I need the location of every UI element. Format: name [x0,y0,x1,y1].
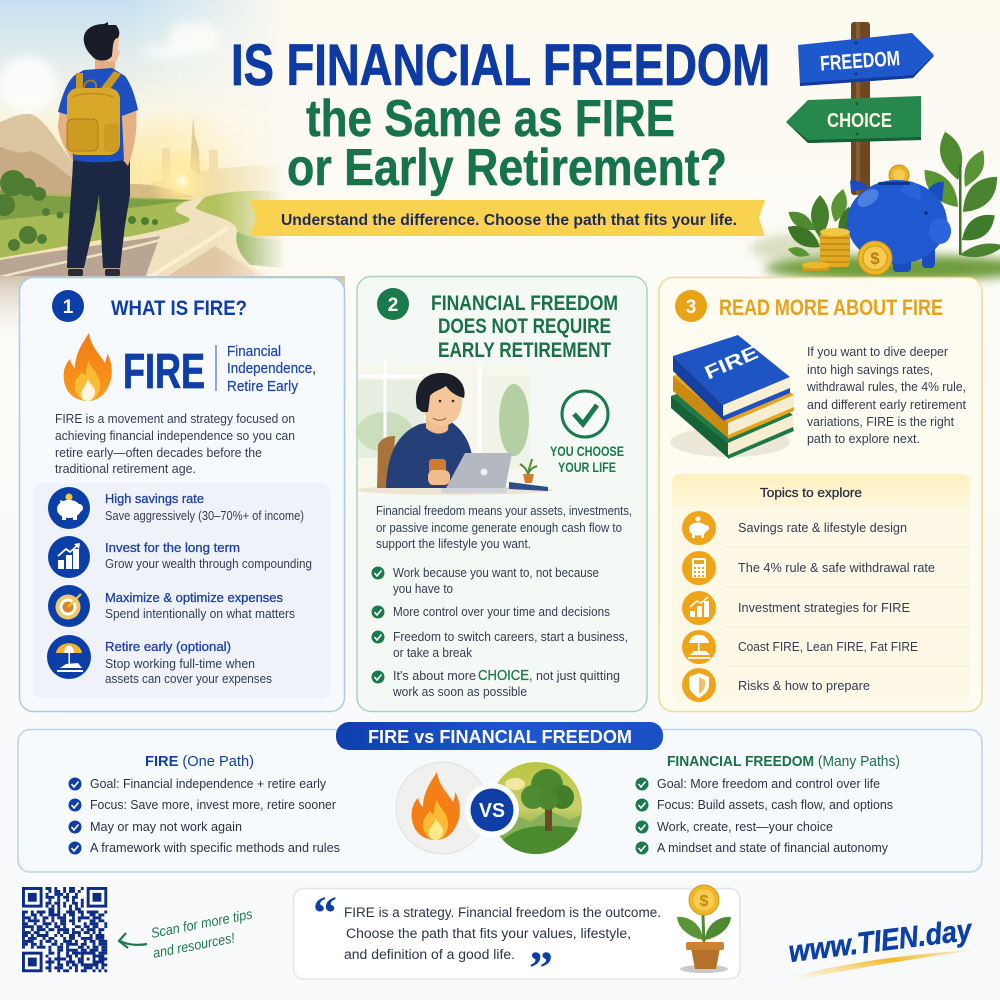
item: high savings rate: Save aggressively (30–70%+ of income) [105,508,304,523]
topic: investment strategies [682,591,910,625]
illustration: stack of books: FIRE [702,342,761,384]
icon: piggy bank with coins [802,165,951,275]
freedom list: A mindset and state of financial autonomy [657,840,888,855]
bullet list: , not just quitting [529,668,620,683]
freedom list: Work, create, rest—your choice [657,819,833,834]
item: retire early optional: assets can cover your expenses [105,671,272,686]
subtitle ribbon [250,200,765,236]
item: maximize and optimize expenses: Spend intentionally on what matters [105,606,295,621]
sign: freedom [798,33,934,86]
quote text [344,905,661,962]
sign: choice [786,96,921,143]
topic: coast lean fat fire: Coast FIRE, Lean FIRE, Fat FIRE [738,639,918,654]
description: and different early retirement [807,397,966,412]
opening quote mark: “ [313,887,337,940]
item: maximize and optimize expenses: Maximize & optimize expenses [105,590,283,605]
freedom list: Focus: Build assets, cash flow, and options [657,797,893,812]
closing quote mark: ” [529,942,553,995]
website logo: www.TIEN.day [787,914,975,969]
description [806,344,966,446]
description: retire early—often decades before the [55,445,262,460]
number badge 1: 1 [63,297,74,318]
bullet list: Work because you want to, not because [393,565,599,580]
title: IS FINANCIAL FREEDOM [231,33,770,98]
bullet list [392,565,628,699]
title: or Early Retirement? [287,139,727,197]
vs graphic [396,762,582,854]
fire definition: Retire Early [227,379,299,395]
item: invest for the long term: Invest for the long term [105,540,240,555]
scan caption: Scan for more tips [150,906,254,941]
fire list: May or may not work again [90,819,242,834]
signpost and plants [750,22,1000,281]
panel: what is fire [20,278,344,712]
vs graphic: VS [479,800,505,822]
topics heading: Topics to explore [760,485,862,500]
item: invest for the long term [105,540,312,571]
fire list: Focus: Save more, invest more, retire sooner [90,797,337,812]
quote box [294,885,740,995]
icon: beach umbrella [47,635,91,679]
column heading: financial freedom: FINANCIAL FREEDOM (Many Paths) [667,753,900,770]
bullet list: Freedom to switch careers, start a business, [393,629,628,644]
heading: FINANCIAL FREEDOM [431,292,618,315]
sign: choice: CHOICE [827,110,892,132]
hero illustration: sky and clouds [0,0,290,278]
number badge 2: 2 [388,295,398,316]
item: maximize and optimize expenses [105,590,295,621]
description: traditional retirement age. [55,461,196,476]
qr code [21,886,108,973]
hero illustration: person with backpack [58,22,138,276]
topic: coast lean fat fire [682,630,918,664]
topic: 4 percent rule: The 4% rule & safe withdrawal rate [738,560,935,575]
description: Financial freedom means your assets, investments, [376,503,632,518]
topic: risks [682,668,870,702]
bullet list: CHOICE [478,667,529,684]
hero illustration: landscape with path [0,114,285,278]
description: If you want to dive deeper [807,344,949,359]
number badge 3 [675,290,707,322]
heading pill [336,722,663,750]
fire checks [68,778,82,854]
topic: investment strategies: Investment strategies for FIRE [738,600,910,615]
fire definition: Independence, [227,361,316,377]
icon: flame [64,333,112,401]
item: retire early optional: Stop working full-time when [105,656,255,671]
bullet list: or take a break [393,645,472,660]
illustration: stack of books [670,335,794,459]
number badge 1 [52,290,84,322]
number badge 2 [377,288,409,320]
icon: coin plant: $ [700,893,709,910]
item: high savings rate: High savings rate [105,491,204,506]
description: support the lifestyle you want. [376,536,531,551]
sign: freedom: FREEDOM [819,47,901,76]
panel: read more about fire [659,278,982,712]
bullet list: It's about more [393,668,476,683]
heading [431,292,618,362]
panel: fire vs financial freedom comparison [18,722,982,872]
heading: EARLY RETIREMENT [438,339,611,362]
description: into high savings rates, [807,362,933,377]
fire wordmark: FIRE [123,345,205,399]
item: retire early optional [105,639,272,686]
item: high savings rate [105,491,304,523]
icon: growth chart [48,536,90,578]
heading pill: FIRE vs FINANCIAL FREEDOM [368,727,632,747]
item: invest for the long term: Grow your wealth through compounding [105,556,312,571]
fire list [90,776,340,855]
freedom list: Goal: More freedom and control over life [657,776,880,791]
icon: target [48,585,90,627]
arrow toward qr code [119,933,147,948]
topic: savings rate [682,511,907,545]
quote text: and definition of a good life. [344,947,515,962]
check bullets [372,566,384,684]
fire list: A framework with specific methods and rules [90,840,340,855]
description [376,503,632,551]
bullet list: you have to [393,581,453,596]
column heading: fire: FIRE (One Path) [145,753,254,770]
quote text: FIRE is a strategy. Financial freedom is the outcome. [344,905,661,920]
topic: risks: Risks & how to prepare [738,678,870,693]
scan caption [150,906,254,961]
list panel [33,483,330,698]
description: variations, FIRE is the right [807,414,954,429]
topic: 4 percent rule [682,551,935,585]
you choose your life: YOU CHOOSE [550,444,624,459]
icon: coin plant [677,885,731,973]
description: achieving financial independence so you can [55,428,295,443]
topic: savings rate: Savings rate & lifestyle design [738,520,907,535]
bottom shading under hero [0,276,345,346]
scan caption: and resources! [152,929,236,961]
icon: check circle [562,391,608,437]
description: withdrawal rules, the 4% rule, [806,379,966,394]
number badge 3: 3 [686,297,696,318]
you choose your life [550,444,624,475]
topics panel [672,474,970,703]
icon: piggy bank with coins: $ [870,249,880,268]
description: path to explore next. [807,431,920,446]
heading: WHAT IS FIRE? [111,297,247,320]
fire list: Goal: Financial independence + retire early [90,776,326,791]
bullet list: work as soon as possible [392,684,527,699]
heading: READ MORE ABOUT FIRE [719,295,943,320]
title: the Same as FIRE [306,90,675,148]
icon: piggy bank [48,487,90,529]
freedom list [657,776,893,855]
subtitle ribbon: Understand the difference. Choose the path that fits your life. [281,212,737,229]
you choose your life: YOUR LIFE [558,460,616,475]
fire definition [227,344,316,395]
panel: financial freedom [357,276,647,712]
title [231,33,770,197]
item: retire early optional: Retire early (optional) [105,639,231,654]
illustration: person at laptop [357,360,553,495]
description [55,411,295,476]
fire definition: Financial [227,344,281,360]
description: or passive income generate enough cash flow to [376,520,622,535]
freedom checks [636,778,648,854]
quote text: Choose the path that fits your values, lifestyle, [346,926,631,941]
heading: DOES NOT REQUIRE [438,315,611,338]
description: FIRE is a movement and strategy focused on [55,411,295,426]
bullet list: More control over your time and decisions [393,604,610,619]
